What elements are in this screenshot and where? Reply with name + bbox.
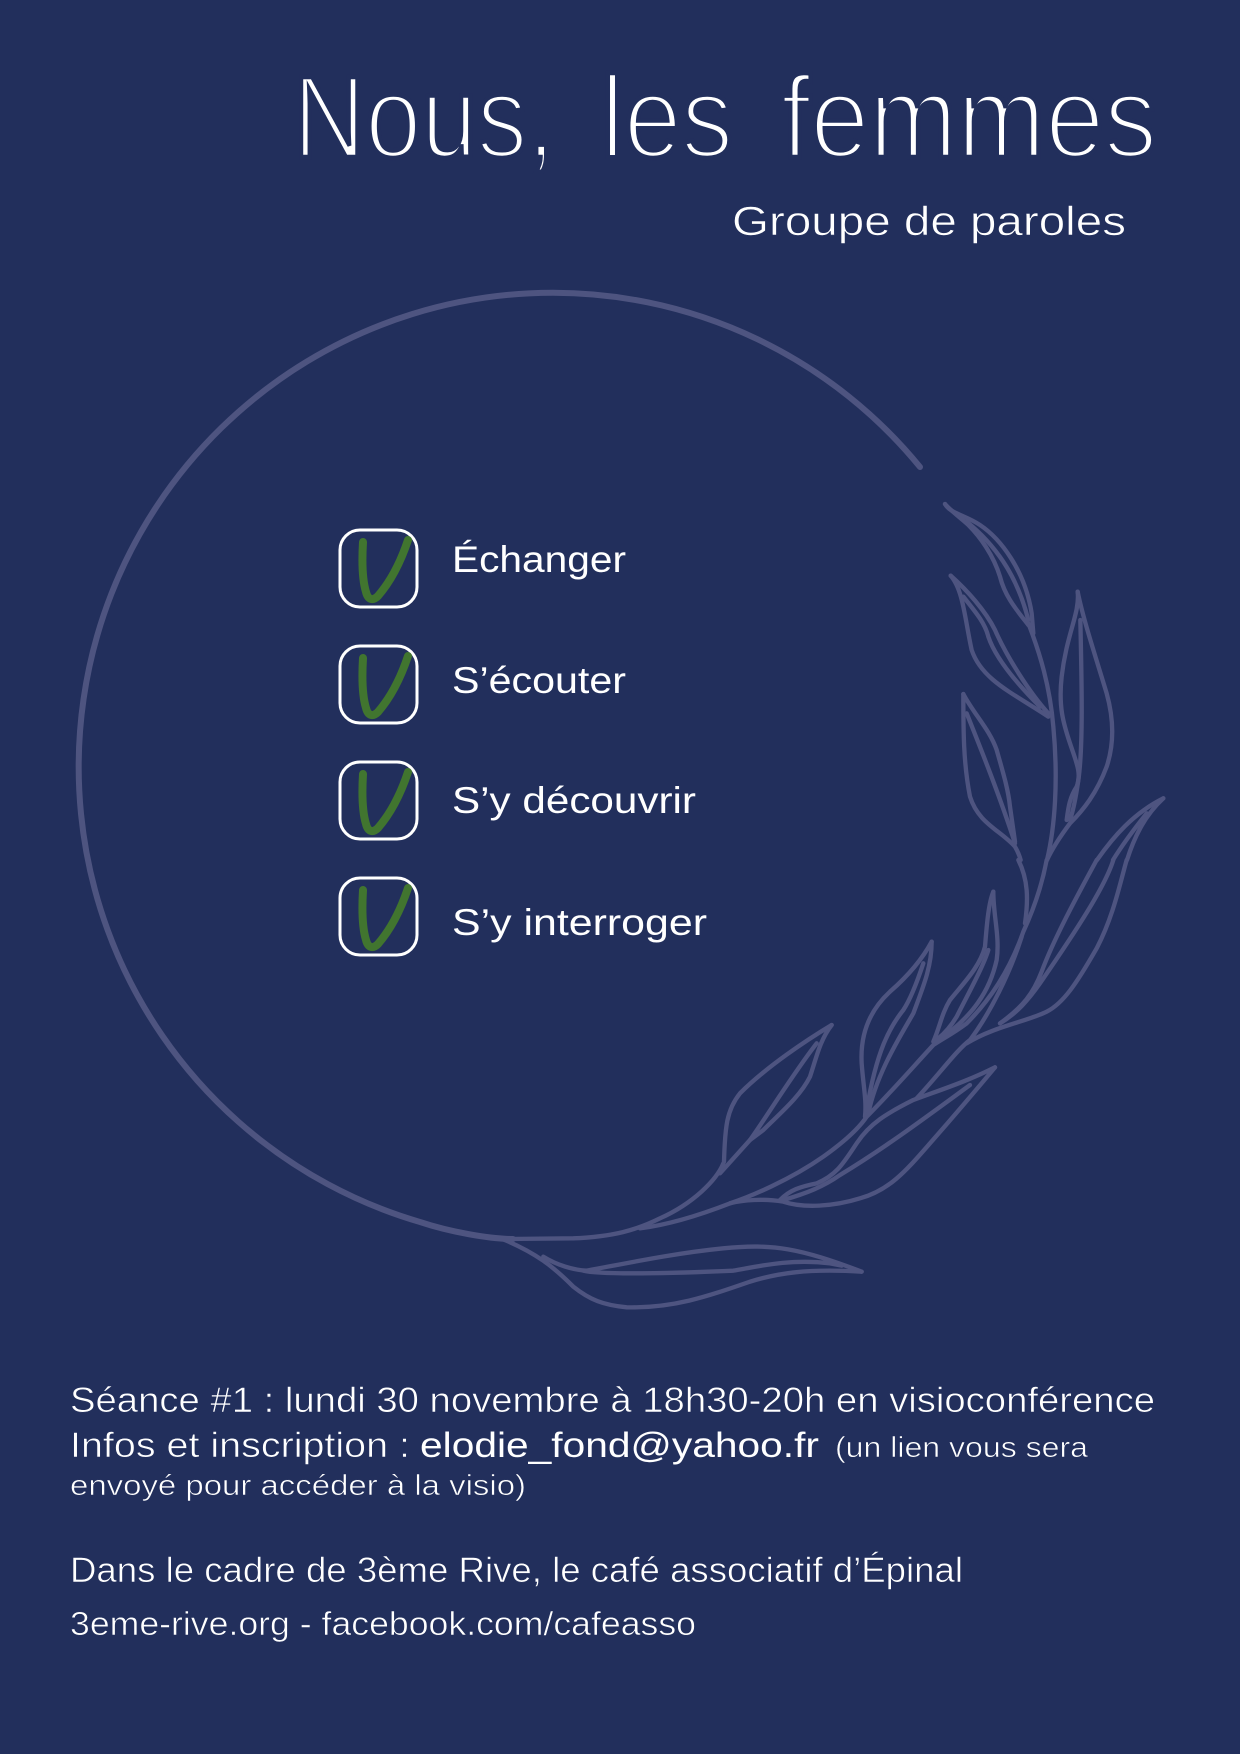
item: Échanger: Échanger bbox=[452, 539, 626, 580]
item: S’y découvrir bbox=[340, 762, 696, 839]
circle wreath ring bbox=[79, 293, 920, 1239]
subtitle: Groupe de paroles bbox=[732, 198, 1126, 244]
leaf branch: middle leaves bbox=[720, 860, 1127, 1206]
title: Nous, bbox=[293, 52, 555, 182]
item: Échanger bbox=[340, 530, 626, 607]
wavy leaf bbox=[933, 892, 998, 1042]
right wide leaf tip bbox=[1097, 798, 1163, 860]
main stem bbox=[1028, 623, 1056, 860]
stem segments bbox=[1018, 860, 1027, 923]
item: S’y interroger: S’y interroger bbox=[452, 902, 707, 943]
session details: (un lien vous sera bbox=[835, 1432, 1089, 1464]
item: S’y interroger bbox=[340, 878, 707, 955]
leaf body right bbox=[967, 860, 1127, 1043]
left leaf bbox=[720, 1025, 832, 1173]
leaf branch: upper leaves bbox=[945, 504, 1163, 860]
checklist bbox=[340, 530, 707, 955]
item: S’écouter bbox=[340, 646, 626, 723]
session details: envoyé pour accéder à la visio) bbox=[70, 1470, 526, 1502]
session details bbox=[70, 1381, 1155, 1502]
organiser details: Dans le cadre de 3ème Rive, le café associatif d’Épinal bbox=[70, 1551, 963, 1590]
organiser details: 3eme-rive.org - facebook.com/cafeasso bbox=[70, 1605, 696, 1642]
lower left leaf bbox=[963, 694, 1021, 860]
centre leaf bbox=[861, 942, 932, 1117]
title: les bbox=[601, 52, 733, 182]
right leaf bbox=[1047, 592, 1112, 860]
title bbox=[293, 52, 1157, 182]
title: femmes bbox=[781, 52, 1157, 182]
top leaf bbox=[945, 504, 1033, 633]
session details: Séance #1 : lundi 30 novembre à 18h30-20h en visioconférence bbox=[70, 1381, 1155, 1420]
session details: Infos et inscription : bbox=[70, 1426, 410, 1465]
session details: elodie_fond@yahoo.fr bbox=[420, 1426, 819, 1465]
item: S’y découvrir: S’y découvrir bbox=[452, 780, 696, 821]
second leaf bbox=[951, 576, 1048, 717]
wide lower leaf bbox=[730, 1067, 995, 1206]
organiser details bbox=[70, 1551, 963, 1642]
leaf branch: bottom leaf bbox=[503, 1163, 862, 1307]
item: S’écouter: S’écouter bbox=[452, 660, 626, 701]
